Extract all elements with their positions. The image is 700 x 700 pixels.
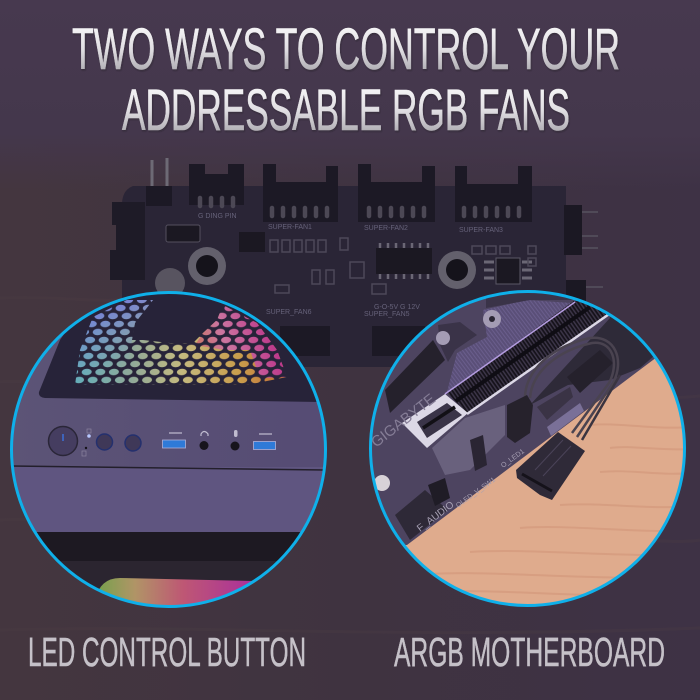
silkscreen labels [198, 213, 503, 318]
jumper [470, 435, 487, 471]
lower connectors [280, 326, 425, 356]
diode D1 [166, 225, 200, 242]
label: LED control button: LED CONTROL BUTTON [28, 629, 306, 675]
lower panel [14, 467, 323, 532]
circuit board [110, 158, 603, 367]
fan connector 1 [263, 164, 338, 222]
silkscreen text: OLED_V_SW1 [455, 476, 497, 510]
silkscreen text: GIGABYTE [368, 391, 439, 451]
circle border [12, 292, 326, 606]
circle border [370, 292, 684, 606]
microphone jack [230, 430, 240, 450]
RGB glow [100, 578, 252, 605]
silkscreen labels: SUPER-FAN3 [459, 227, 503, 234]
panel seam [10, 466, 325, 470]
upper left slot [385, 340, 445, 413]
silkscreen labels: G DING PIN [198, 213, 237, 220]
button: reset [125, 435, 141, 451]
wood grain [430, 424, 690, 596]
left header [146, 186, 172, 206]
small screw [436, 331, 450, 345]
upper dark region [438, 293, 573, 362]
header row [537, 387, 573, 420]
motherboard [372, 298, 654, 545]
ding pin connector [189, 164, 244, 205]
panel: ARGB motherboard photo [365, 285, 690, 615]
transparent latch [432, 405, 505, 475]
label strip [547, 403, 584, 436]
small jumper [428, 478, 450, 506]
fan connector 2 [358, 164, 435, 222]
panel: LED control button photo [10, 291, 327, 608]
button: LED control [96, 434, 112, 450]
bottom vent [36, 532, 300, 561]
right side header [564, 205, 603, 302]
chip right [484, 258, 532, 284]
title [72, 17, 620, 143]
RGB hex lights [75, 300, 287, 385]
USB port left [162, 433, 186, 448]
wood surface [406, 358, 683, 604]
photo contents [365, 285, 690, 615]
silkscreen labels: SUPER_FAN5 [364, 311, 410, 318]
mounting screw [483, 310, 501, 328]
connector pins [200, 198, 519, 216]
short slot white latch [402, 394, 468, 448]
left power connector [110, 202, 145, 280]
chip center [376, 243, 432, 279]
silkscreen text: F_AUDIO [415, 499, 457, 534]
mounting hole right [438, 251, 476, 289]
fan connector 3 [455, 166, 532, 222]
silkscreen labels: G-O-5V G 12V [374, 304, 420, 311]
component cluster [270, 238, 536, 294]
silkscreen labels: SUPER-FAN1 [268, 224, 312, 231]
capacitor [155, 268, 185, 298]
cable loop [525, 338, 620, 440]
silkscreen labels: SUPER_FAN6 [266, 309, 312, 316]
capacitor [374, 475, 390, 491]
pin headers [567, 350, 613, 393]
board body [122, 186, 585, 367]
power button [48, 426, 78, 456]
audio header [395, 490, 448, 540]
dupont plug [507, 395, 533, 443]
far right dark region [532, 316, 653, 404]
silkscreen text [368, 391, 526, 534]
case body [13, 334, 324, 467]
top mesh panel [38, 294, 316, 402]
silkscreen labels: SUPER-FAN2 [364, 225, 408, 232]
mounting hole left [188, 247, 226, 285]
long slot [445, 300, 612, 414]
headphone jack [200, 432, 208, 450]
pins top left [152, 158, 167, 192]
USB port right [254, 434, 276, 450]
photo contents [13, 294, 324, 605]
trace area [447, 300, 572, 392]
silkscreen text: O_LED1 [500, 448, 526, 470]
chip left [239, 232, 265, 252]
bottom mesh [60, 561, 276, 588]
RGB connector [516, 432, 585, 500]
LED indicators [82, 429, 91, 456]
